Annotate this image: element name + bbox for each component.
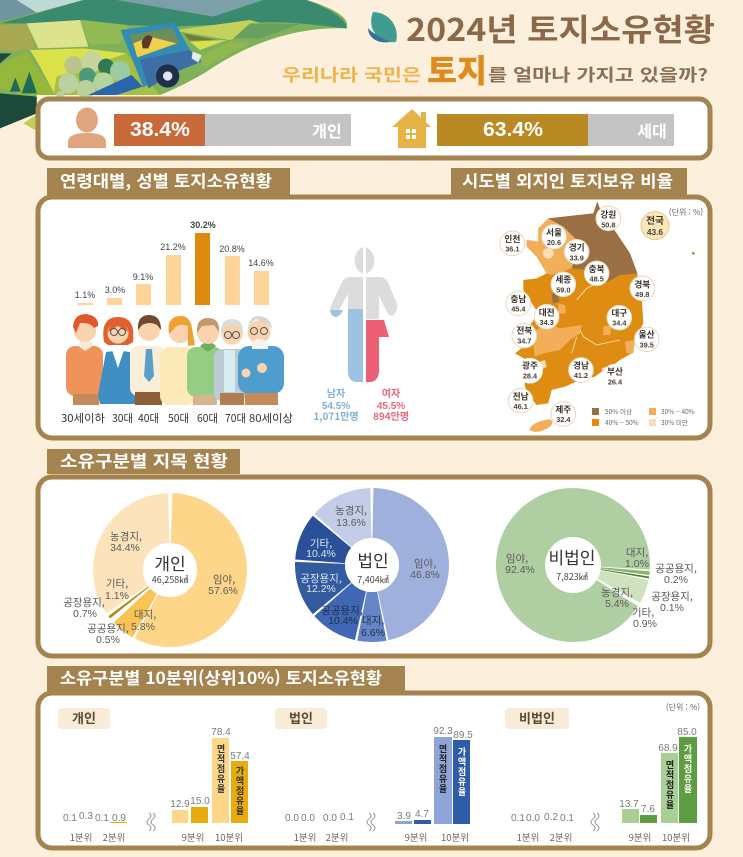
bubble: Ulsan: 39.5: [640, 340, 654, 349]
bubble: national: [641, 212, 669, 240]
icon: leaf: [368, 12, 397, 42]
donut chart: corporate: 46.8%: [410, 569, 440, 581]
donut chart: individual: 0.7%: [73, 608, 97, 620]
bubble: national: 43.6: [647, 227, 663, 237]
bubble: Ulsan: 울산: [639, 328, 655, 340]
bar chart: non-corporate deciles: 9분위: [629, 830, 651, 844]
donut chart: corporate: 7,404㎢: [357, 573, 389, 586]
map legend: 30% 미만: [661, 417, 688, 427]
donut chart: corporate: 기타,: [310, 536, 332, 551]
bubble: Gyeongbuk: 49.8: [635, 290, 649, 299]
donut chart: individual: 농경지,: [110, 529, 142, 544]
bar chart: non-corporate deciles: 10분위: [662, 830, 690, 844]
bar chart: corporate deciles: 3.9: [397, 811, 411, 822]
bar chart: individual deciles: 12.9: [170, 799, 190, 810]
bar chart: corporate deciles: 89.5: [453, 730, 473, 741]
heading: land category: [47, 448, 240, 474]
donut chart: corporate: 대지,: [362, 613, 384, 628]
label: individual: [58, 708, 110, 729]
label: corporate: [275, 708, 327, 729]
bubble: Jeonbuk: 34.7: [517, 336, 531, 345]
bubble: Jeonbuk: 전북: [516, 325, 532, 337]
donut chart: non-corporate: 5.4%: [605, 598, 629, 610]
bar chart: individual deciles: 2분위: [103, 830, 125, 844]
donut chart: individual: 5.8%: [131, 621, 155, 633]
bar chart: age groups: 1.1%: [75, 290, 95, 300]
donut chart: corporate: 농경지,: [335, 503, 367, 518]
bar chart: corporate deciles: 2분위: [326, 830, 348, 844]
bubble: Daejeon: 대전: [539, 306, 555, 318]
bar chart: corporate deciles: 0.0: [323, 813, 337, 824]
gender text: male: 1,071만명: [313, 408, 359, 423]
label: non-corporate: [505, 708, 569, 729]
donut chart: corporate: 12.2%: [306, 583, 336, 595]
bubble: Chungnam: [506, 291, 531, 316]
bar chart: individual deciles: 0.1: [95, 813, 109, 824]
bubble: Gangwon: [596, 206, 621, 231]
bar chart: individual deciles: 1분위: [70, 830, 92, 844]
bubble: Gwangju: 광주: [522, 360, 538, 372]
age axis labels: 80세이상: [249, 410, 293, 426]
donut chart: individual: 개인: [154, 550, 186, 575]
bar chart: individual deciles: 15.0: [190, 796, 210, 807]
map unit: (단위 : %): [669, 207, 703, 218]
age axis labels: 60대: [197, 410, 218, 426]
bubble: national: 전국: [646, 213, 664, 227]
bar chart: non-corporate deciles: 7.6: [641, 804, 655, 815]
icon: produce on truck: [57, 51, 130, 99]
bar: household: 세대: [637, 118, 667, 142]
bubble: Chungnam: 충남: [510, 293, 526, 305]
label: individual: 개인: [72, 708, 96, 727]
donut chart: individual: 공공용지,: [87, 621, 129, 636]
subtitle: 우리나라 국민은: [282, 61, 421, 86]
bar chart: corporate deciles: 9분위: [405, 830, 427, 844]
bubble: Jeonbuk: [512, 323, 537, 348]
bubble: Gyeonggi: 33.9: [570, 253, 584, 262]
donut chart: individual: 1.1%: [105, 590, 129, 602]
bar chart: individual deciles: 9분위: [182, 830, 204, 844]
bubble: Seoul: 20.6: [547, 238, 561, 247]
bubble: Incheon: [500, 231, 525, 256]
bar chart: age groups: 21.2%: [160, 242, 186, 252]
bar chart: non-corporate deciles: 68.9: [658, 743, 678, 754]
age axis labels: 70대: [225, 410, 246, 426]
bar chart: corporate deciles: 1분위: [294, 830, 316, 844]
map legend: 40% ~ 50%: [605, 417, 639, 427]
age axis labels: 50대: [168, 410, 189, 426]
icon: person: [68, 108, 106, 148]
bubble: Busan: [603, 364, 627, 389]
donut chart: non-corporate: 7,823㎢: [556, 570, 588, 583]
gender text: female: [373, 385, 409, 423]
bar chart: age groups: 9.1%: [133, 272, 153, 282]
bubble: Chungnam: 45.4: [511, 305, 526, 314]
donut chart: non-corporate: 1.0%: [625, 558, 649, 570]
bubble: Chungbuk: 충북: [589, 263, 605, 275]
icon: axis break: [591, 813, 599, 831]
gender text: male: [313, 385, 359, 423]
map: Korea regional shares: [500, 202, 695, 432]
bubble: Gangwon: 50.8: [601, 220, 615, 229]
bubble: Jeonnam: 전남: [513, 390, 529, 402]
age axis labels: 40대: [138, 410, 159, 426]
bar chart: non-corporate deciles: 0.1: [560, 813, 574, 824]
map legend: [592, 406, 695, 427]
bubble: Gyeongbuk: [630, 276, 655, 301]
region bubbles: [500, 206, 669, 426]
donut chart: non-corporate: 임야,: [506, 551, 528, 566]
bar chart: age groups: 20.8%: [219, 244, 245, 254]
donut chart: non-corporate: 농경지,: [601, 585, 633, 600]
bar chart: non-corporate deciles: 가액점유율: [682, 743, 694, 794]
gender text: male: 54.5%: [322, 401, 350, 412]
age axis labels: [61, 410, 293, 426]
donut chart: non-corporate: 기타,: [632, 605, 654, 620]
bar chart: individual deciles: 78.4: [211, 727, 231, 738]
bar chart: age groups: 3.0%: [105, 285, 125, 295]
illustration: seven people by age: [66, 314, 284, 405]
bubble: Jeju: 제주: [555, 403, 571, 415]
bar chart: individual deciles: 면적점유율: [214, 743, 228, 794]
bar chart: corporate deciles: 0.0: [301, 813, 315, 824]
donut chart: corporate: 6.6%: [361, 627, 385, 639]
bubble: Daegu: 34.4: [612, 319, 627, 328]
title: 2024년 토지소유현황: [406, 5, 715, 50]
donut chart: individual: [63, 518, 238, 646]
bar chart: corporate deciles: 0.0: [285, 813, 299, 824]
donut chart: non-corporate: 92.4%: [505, 564, 535, 576]
donut chart: corporate: 법인: [357, 547, 389, 572]
bubble: Daejeon: [534, 304, 559, 329]
bubble: Gyeongnam: 41.2: [574, 371, 588, 380]
bar chart: age groups: 14.6%: [248, 258, 274, 268]
bar: individual: [114, 114, 351, 146]
bar chart: corporate deciles: 0.1: [340, 812, 354, 823]
donut chart: individual: 대지,: [134, 607, 156, 622]
donut chart: individual: 57.6%: [208, 585, 238, 597]
bar chart: non-corporate deciles: 면적점유율: [664, 759, 676, 810]
heading: land category: 소유구분별 지목 현황: [60, 448, 228, 472]
subtitle: [282, 46, 708, 92]
donut chart: non-corporate: [505, 509, 697, 630]
illustration: landscape with truck: [0, 0, 347, 131]
donut chart: corporate: 10.4%: [328, 615, 358, 627]
bar chart: non-corporate deciles: 0.1: [511, 813, 525, 824]
icon: gender split figure: [330, 247, 397, 382]
donut chart: individual: 0.5%: [96, 634, 120, 646]
bar chart: individual deciles: [58, 708, 250, 844]
bar chart: individual deciles: 10분위: [215, 830, 243, 844]
bar chart: non-corporate deciles: [505, 708, 697, 844]
map legend: 50% 이상: [605, 406, 632, 416]
icon: blue truck: [88, 23, 202, 95]
bubble: Gyeongnam: 경남: [573, 359, 589, 371]
donut chart: corporate: 13.6%: [336, 517, 366, 529]
donut chart: individual: 46,258㎢: [152, 573, 188, 586]
bar chart: individual deciles: 0.9: [112, 813, 126, 824]
bar: individual: 개인: [312, 118, 342, 142]
donut chart: non-corporate: 0.2%: [664, 574, 688, 586]
gender text: female: 45.5%: [377, 401, 405, 412]
panel: land category donuts: [38, 477, 710, 656]
gender text: female: 여자: [382, 385, 400, 400]
donut chart: individual: 공장용지,: [63, 595, 105, 610]
bubble: Jeju: [551, 402, 576, 426]
subtitle: 토지: [427, 46, 487, 92]
bubble: Sejong: 세종: [555, 274, 571, 286]
donut chart: non-corporate: 비법인: [549, 544, 595, 569]
bubble: Chungbuk: [584, 261, 609, 286]
bubble: Gyeonggi: 경기: [569, 242, 585, 254]
bubble: Sejong: 59.0: [556, 285, 570, 294]
bar chart: corporate deciles: 면적점유율: [436, 743, 450, 794]
bar chart: non-corporate deciles: 0.0: [526, 813, 540, 824]
bar: household: 63.4%: [483, 119, 543, 141]
bubble: Gyeongnam: [569, 358, 593, 382]
donut chart: corporate: [300, 503, 440, 639]
bar chart: corporate deciles: 10분위: [441, 830, 469, 844]
age axis labels: 30대: [112, 410, 133, 426]
bubble: Jeonnam: [508, 388, 533, 413]
bar chart: non-corporate deciles: 13.7: [619, 799, 639, 810]
panel: ownership summary: [38, 99, 710, 158]
bubble: Incheon: 인천: [504, 233, 520, 245]
map legend: 30% ~ 40%: [661, 406, 695, 416]
bubble: Ulsan: [634, 327, 659, 352]
bar chart: age groups: 30.2%: [190, 220, 216, 230]
bubble: Gwangju: 28.4: [523, 371, 538, 380]
donut chart: non-corporate: 0.1%: [660, 602, 684, 614]
subtitle: 를 얼마나 가지고 있을까?: [488, 61, 708, 86]
bar chart: age groups: [75, 220, 274, 305]
bar chart: corporate deciles: 92.3: [433, 726, 453, 737]
bubble: Sejong: [551, 272, 576, 297]
label: non-corporate: 비법인: [519, 708, 555, 727]
donut chart: corporate: 임야,: [414, 556, 436, 571]
bubble: Jeonnam: 46.1: [514, 402, 528, 411]
bar chart: individual deciles: 57.4: [230, 751, 250, 762]
donut chart: individual: 기타,: [106, 576, 128, 591]
bar chart: individual deciles: 0.1: [63, 813, 77, 824]
bubble: Gyeongbuk: 경북: [634, 278, 650, 290]
donut chart: non-corporate: 공장용지,: [651, 589, 693, 604]
unit note: (단위 : %): [666, 702, 700, 713]
bubble: Daegu: 대구: [611, 307, 627, 319]
donut chart: corporate: 공장용지,: [300, 571, 342, 586]
donut chart: non-corporate: 공공용지,: [655, 561, 697, 576]
bubble: Gangwon: 강원: [600, 209, 616, 221]
bar: individual: 38.4%: [130, 119, 190, 141]
donut chart: non-corporate: 0.9%: [633, 618, 657, 630]
bubble: Busan: 26.4: [608, 378, 623, 387]
donut chart: corporate: 공공용지,: [321, 603, 363, 618]
heading: age and gender: 연령대별, 성별 토지소유현황: [60, 168, 272, 192]
icon: axis break: [367, 813, 375, 831]
heading: top 10 percent: 소유구분별 10분위(상위10%) 토지소유현황: [60, 665, 382, 689]
donut chart: individual: 임야,: [213, 572, 235, 587]
bar chart: individual deciles: 0.3: [79, 811, 93, 822]
icon: trees: [10, 72, 37, 93]
bar chart: individual deciles: 가액점유율: [234, 765, 246, 816]
bar chart: corporate deciles: [275, 708, 473, 844]
bubble: Seoul: [542, 224, 566, 249]
panel: decile bar charts: [38, 693, 710, 848]
bubble: Chungbuk: 48.5: [590, 275, 604, 284]
bubble: Busan: 부산: [607, 366, 623, 378]
gender text: male: 남자: [327, 385, 345, 400]
donut chart: non-corporate: 대지,: [626, 545, 648, 560]
bubble: Daegu: [607, 305, 632, 330]
bubble: Daejeon: 34.3: [540, 318, 554, 327]
bar chart: non-corporate deciles: 85.0: [677, 727, 697, 738]
icon: axis break: [147, 813, 155, 831]
bubble: Seoul: 서울: [546, 226, 562, 238]
heading: regional ratio: 시도별 외지인 토지보유 비율: [462, 168, 673, 192]
bubble: Gyeonggi: [564, 239, 589, 264]
gender text: female: 894만명: [373, 408, 409, 423]
panel: age, gender and regional: [38, 197, 710, 438]
bar chart: non-corporate deciles: 2분위: [550, 830, 572, 844]
bar chart: corporate deciles: 가액점유율: [456, 746, 468, 797]
donut chart: corporate: 10.4%: [306, 548, 336, 560]
bubble: Jeju: 32.4: [556, 415, 571, 424]
label: corporate: 법인: [289, 708, 313, 727]
bar: household: [437, 114, 674, 146]
bubble: Gwangju: [518, 358, 542, 383]
bar chart: corporate deciles: 4.7: [415, 809, 429, 820]
bubble: Incheon: 36.1: [505, 245, 519, 254]
age axis labels: 30세이하: [61, 410, 105, 426]
bar chart: non-corporate deciles: 0.2: [544, 812, 558, 823]
icon: house: [392, 109, 431, 148]
donut chart: individual: 34.4%: [110, 542, 140, 554]
bar chart: non-corporate deciles: 1분위: [517, 830, 539, 844]
